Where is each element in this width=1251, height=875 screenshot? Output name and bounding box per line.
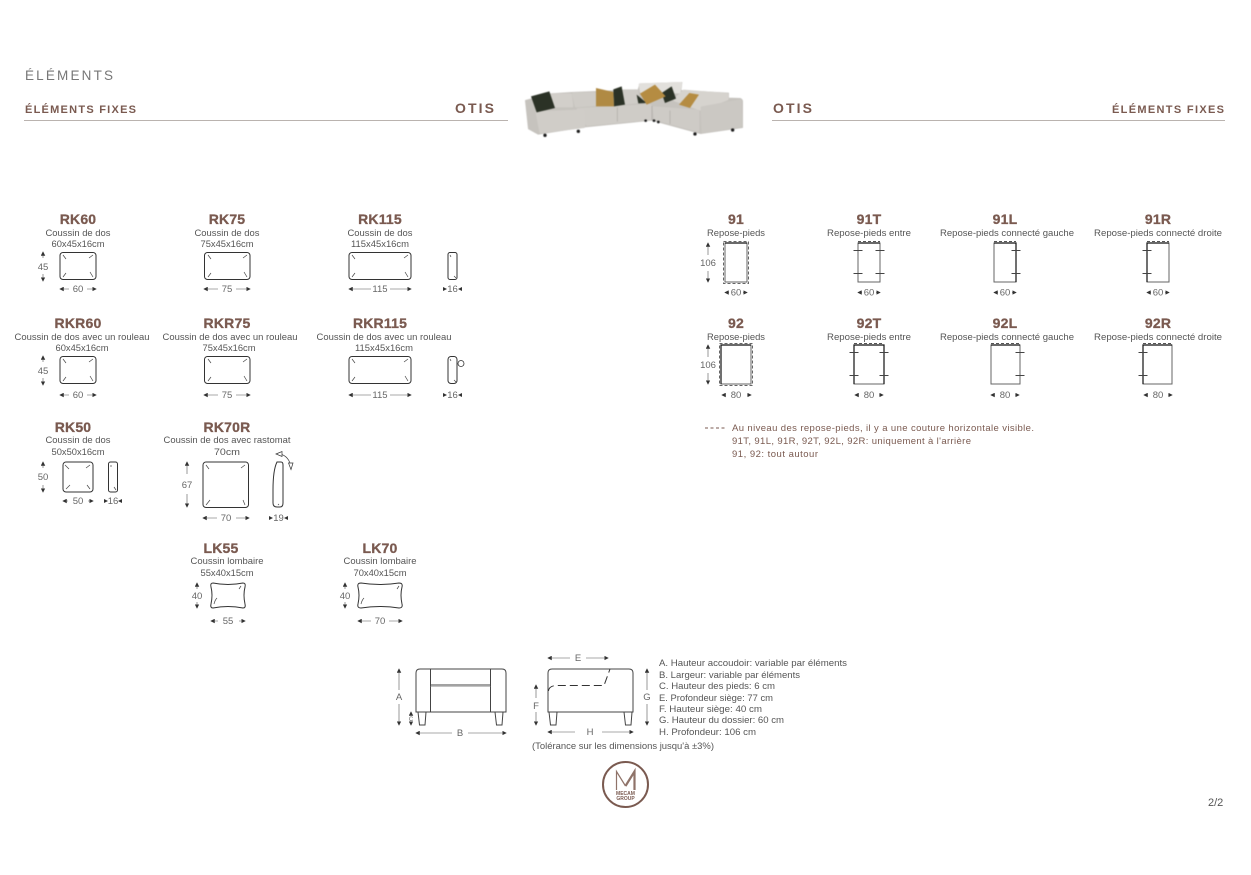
dimension: 75: 75	[222, 284, 232, 295]
dimension: 80: 80	[731, 390, 741, 401]
panel: RK50: RK50	[55, 419, 91, 435]
panel: RKR115: RKR115	[353, 315, 407, 331]
logo: Mecam Group: GROUP	[616, 796, 635, 802]
panel: RKR115: 115x45x16cm	[355, 343, 413, 354]
panel: LK55	[190, 540, 264, 627]
panel: 92L: 92L	[993, 315, 1018, 331]
icon: cushion side view with roll	[448, 356, 464, 384]
panel: RK70R	[164, 419, 293, 524]
diagram: side view	[533, 653, 651, 738]
panel: 92: 92	[728, 315, 744, 331]
icon: cushion RK70R	[203, 462, 248, 508]
arrow: E: E	[575, 653, 581, 664]
dimension: 60: 60	[864, 288, 874, 298]
panel: 92: Repose-pieds	[707, 332, 765, 343]
arrow: H: H	[587, 727, 594, 738]
icon: footrest 92L	[991, 344, 1024, 384]
icon: cushion RK115	[349, 252, 411, 280]
panel: 91R: 91R	[1145, 211, 1171, 227]
dimension: 50 height: 50	[38, 472, 48, 483]
collection name right: OTIS	[773, 100, 812, 116]
diagram: front view	[396, 669, 506, 739]
panel: RK60	[38, 211, 111, 295]
icon: lumbar cushion LK55	[211, 583, 245, 608]
dimension: 70: 70	[375, 616, 385, 627]
panel: RK115	[348, 211, 462, 295]
panel: RK60: RK60	[60, 211, 96, 227]
icon: curved side view with rotation arrow	[273, 452, 293, 507]
dimension: 16	[443, 390, 462, 401]
panel: 92L	[940, 315, 1074, 401]
arrow: G: G	[643, 692, 651, 703]
dimension: 60: 60	[1000, 288, 1010, 298]
panel: 91: Repose-pieds	[707, 228, 765, 239]
panel: LK70: 70x40x15cm	[354, 568, 407, 579]
dimension legend: G. Hauteur du dossier: 60 cm	[659, 715, 784, 726]
header left	[24, 100, 508, 120]
panel: 92T: Repose-pieds entre	[827, 332, 911, 343]
dimension: 115	[349, 390, 411, 401]
tolerance note: (Tolérance sur les dimensions jusqu'à ±3%)	[532, 741, 714, 752]
panel: RK70R: RK70R	[204, 419, 250, 435]
dimension: 16: 16	[447, 390, 458, 401]
dimension: 115: 115	[372, 390, 388, 401]
icon: footrest 92	[720, 344, 752, 386]
panel: 91R: Repose-pieds connecté droite	[1094, 228, 1222, 239]
panel: RK60: Coussin de dos	[46, 228, 111, 239]
dimension: 106: 106	[700, 258, 716, 269]
dimension: 80: 80	[1153, 390, 1163, 401]
dimension: 60: 60	[73, 390, 83, 401]
panel: 91	[700, 211, 765, 298]
panel: RK75: 75x45x16cm	[200, 239, 254, 250]
panel: RK115: RK115	[358, 211, 402, 227]
dimension: 19: 19	[273, 513, 284, 524]
icon: footrest 92R	[1138, 344, 1172, 384]
dimension legend: A. Hauteur accoudoir: variable par éléments	[659, 658, 847, 669]
dimension: 45: 45	[38, 366, 48, 377]
panel: RKR75: 75x45x16cm	[202, 343, 256, 354]
panel: RKR60: Coussin de dos avec un rouleau	[14, 332, 150, 343]
icon: cushion RK75	[204, 252, 250, 280]
panel: LK70: Coussin lombaire	[344, 556, 416, 567]
icon: cushion RK60	[60, 252, 96, 280]
dimension legend: E. Profondeur siège: 77 cm	[659, 693, 773, 704]
icon: footrest 91R	[1142, 242, 1169, 282]
icon: cushion side view	[108, 462, 118, 492]
panel: RKR75: RKR75	[204, 315, 250, 331]
footrest seam note: 91T, 91L, 91R, 92T, 92L, 92R: uniquement à l'arrière	[732, 436, 971, 447]
panel: RKR115	[316, 315, 464, 401]
panel: RK75: RK75	[209, 211, 245, 227]
panel: RKR60: 60x45x16cm	[56, 343, 109, 354]
collection name left: OTIS	[455, 100, 494, 116]
logo: Mecam Group	[603, 762, 648, 807]
panel: RK50	[38, 419, 122, 507]
arrow: C: C	[409, 717, 414, 723]
dimension legend: C. Hauteur des pieds: 6 cm	[659, 681, 775, 692]
icon: cushion side view	[448, 252, 457, 280]
sofa illustration	[526, 83, 742, 137]
arrow: B: B	[457, 728, 463, 739]
panel: RK50: Coussin de dos	[46, 435, 111, 446]
panel: RK60: 60x45x16cm	[52, 239, 105, 250]
dimension: 67: 67	[182, 480, 192, 491]
dimension: 50 width: 50	[73, 496, 83, 507]
panel: 91R	[1094, 211, 1222, 298]
panel: RK75	[194, 211, 260, 295]
panel: RK50: 50x50x16cm	[52, 447, 105, 458]
dimension: 40: 40	[192, 591, 202, 602]
dimension legend: F. Hauteur siège: 40 cm	[659, 704, 762, 715]
panel: 91T: Repose-pieds entre	[827, 228, 911, 239]
panel: 92L: Repose-pieds connecté gauche	[940, 332, 1074, 343]
panel: 91L: 91L	[993, 211, 1018, 227]
page title: ÉLÉMENTS	[25, 68, 113, 83]
panel: RKR75	[162, 315, 298, 401]
dimension legend: B. Largeur: variable par éléments	[659, 670, 800, 681]
panel: RK75: Coussin de dos	[194, 228, 260, 239]
footrest seam note	[705, 423, 1034, 460]
panel: LK70	[340, 540, 416, 627]
panel: RK70R: Coussin de dos avec rastomat	[164, 435, 291, 446]
icon: footrest 91L	[994, 242, 1020, 282]
panel: RKR75: Coussin de dos avec un rouleau	[162, 332, 298, 343]
icon: cushion RKR115	[349, 356, 411, 384]
section label right: ÉLÉMENTS FIXES	[1112, 103, 1224, 116]
dimension: 60: 60	[731, 288, 741, 298]
dimension: 45: 45	[38, 262, 48, 273]
panel: RKR60: RKR60	[55, 315, 101, 331]
panel: 92R	[1094, 315, 1222, 401]
panel: RK70R: 70cm	[214, 447, 240, 458]
dimension legend	[659, 658, 847, 738]
panel: 92R: Repose-pieds connecté droite	[1094, 332, 1222, 343]
dimension: 16: 16	[447, 284, 458, 295]
icon: cushion RK50	[63, 462, 93, 492]
dimension: 106: 106	[700, 360, 716, 371]
dimension: 70: 70	[221, 513, 231, 524]
dimension: 60: 60	[73, 284, 83, 295]
icon: lumbar cushion LK70	[358, 583, 402, 608]
panel: 91T: 91T	[857, 211, 882, 227]
dimension legend: H. Profondeur: 106 cm	[659, 727, 756, 738]
dimension: 115: 115	[372, 284, 388, 295]
panel: LK55: 55x40x15cm	[200, 568, 254, 579]
arrow: F: F	[533, 701, 539, 712]
panel: 91T	[827, 211, 911, 298]
panel: RK115: Coussin de dos	[348, 228, 413, 239]
panel: 92	[700, 315, 765, 401]
panel: 91: 91	[728, 211, 744, 227]
panel: 92R: 92R	[1145, 315, 1171, 331]
dimension: 16: 16	[108, 496, 118, 507]
panel: RK115: 115x45x16cm	[351, 239, 409, 250]
icon: footrest 92T	[850, 344, 888, 384]
dimension: 40: 40	[340, 591, 350, 602]
panel: RKR60	[14, 315, 150, 401]
icon: cushion RKR60	[60, 356, 96, 384]
dimension: 80: 80	[864, 390, 874, 401]
footrest seam note: Au niveau des repose-pieds, il y a une couture horizontale visible.	[732, 423, 1034, 434]
dimension: 60: 60	[1153, 288, 1163, 298]
panel: RKR115: Coussin de dos avec un rouleau	[316, 332, 452, 343]
logo: Mecam Group: MECAM	[616, 791, 635, 797]
dimension: 75: 75	[222, 390, 232, 401]
icon: footrest 91	[724, 242, 748, 284]
arrow: A: A	[396, 692, 403, 703]
panel: LK55: LK55	[203, 540, 239, 556]
dimension: 55: 55	[223, 616, 233, 627]
panel: LK55: Coussin lombaire	[190, 556, 264, 567]
dimension: 80: 80	[1000, 390, 1010, 401]
icon: footrest 91T	[854, 242, 884, 282]
panel: LK70: LK70	[362, 540, 398, 556]
panel: 92T: 92T	[857, 315, 882, 331]
panel: 91L: Repose-pieds connecté gauche	[940, 228, 1074, 239]
panel: 92T	[827, 315, 911, 401]
footrest seam note: 91, 92: tout autour	[732, 449, 818, 460]
panel: 91L	[940, 211, 1074, 298]
icon: cushion RKR75	[204, 356, 250, 384]
header right	[772, 100, 1225, 120]
section label left: ÉLÉMENTS FIXES	[25, 103, 136, 116]
page number: 2/2	[1208, 797, 1223, 809]
